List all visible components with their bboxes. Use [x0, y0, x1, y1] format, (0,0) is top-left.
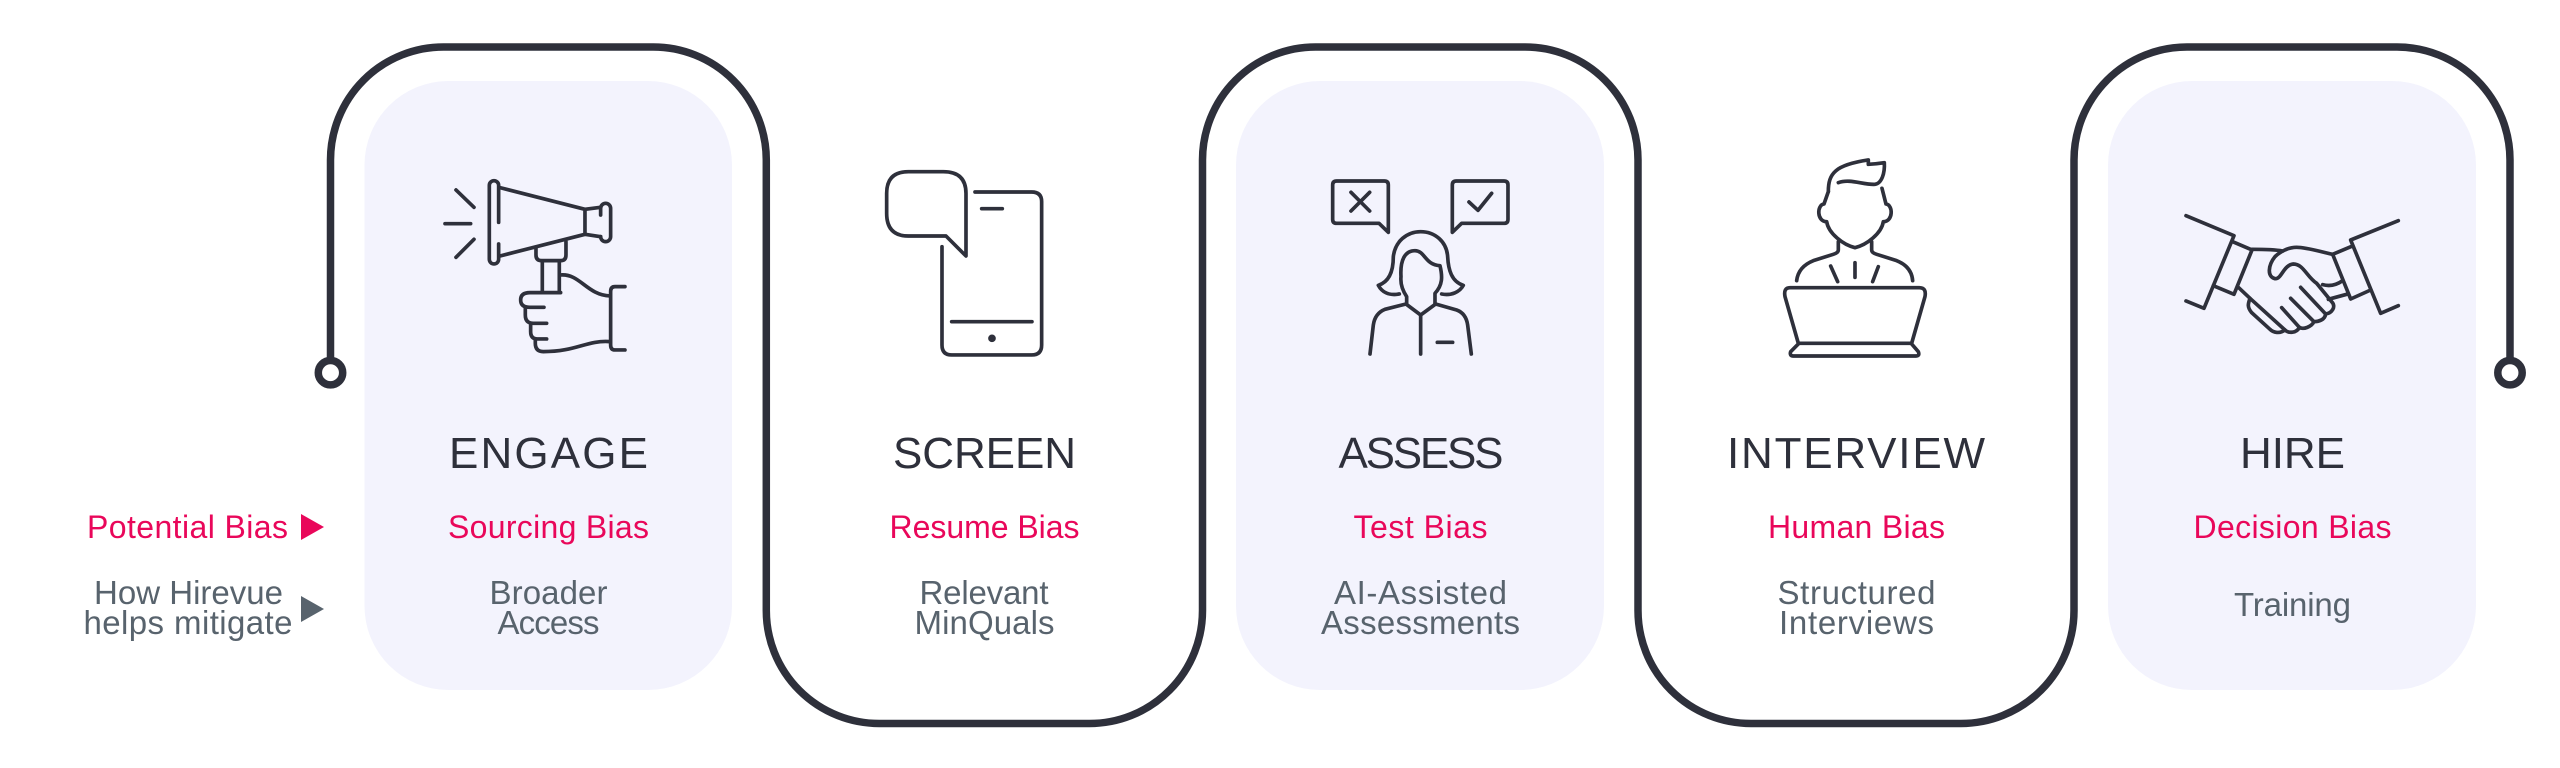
arrow: how hirevue helps mitigate	[301, 596, 324, 622]
heading: engage: ENGAGE	[449, 429, 648, 478]
column: screen	[887, 172, 1080, 641]
label: how hirevue helps mitigate: helps mitigate	[84, 604, 292, 641]
mitigation: ai-assisted assessments: AI-Assisted	[1334, 574, 1507, 611]
heading: interview: INTERVIEW	[1727, 429, 1985, 478]
row labels	[84, 509, 324, 641]
mitigation: training: Training	[2234, 586, 2351, 623]
bias: human bias: Human Bias	[1768, 509, 1945, 545]
mitigation: relevant minquals: Relevant	[920, 574, 1048, 611]
panel background: engage	[364, 81, 732, 690]
mitigation: relevant minquals: MinQuals	[914, 604, 1054, 641]
heading: hire: HIRE	[2240, 429, 2345, 478]
bias: resume bias: Resume Bias	[890, 509, 1080, 545]
icon: phone with speech bubble	[887, 172, 1042, 355]
arrow: potential bias	[301, 514, 324, 540]
bias: test bias: Test Bias	[1354, 509, 1488, 545]
bias: decision bias: Decision Bias	[2194, 509, 2392, 545]
winding connector line with end circles	[318, 47, 2522, 724]
mitigation: structured interviews: Structured	[1778, 574, 1936, 611]
column: hire	[2186, 216, 2398, 623]
mitigation: broader access: Access	[498, 604, 600, 641]
label: how hirevue helps mitigate: How Hirevue	[94, 574, 283, 611]
label: potential bias: Potential Bias	[87, 509, 288, 545]
panel background: assess	[1236, 81, 1604, 690]
heading: screen: SCREEN	[893, 429, 1076, 478]
icon: handshake	[2186, 216, 2398, 332]
panel background: hire	[2108, 81, 2476, 690]
icon: person with cross and check speech boxes	[1333, 181, 1508, 354]
icon: megaphone in hand	[445, 181, 625, 352]
mitigation: structured interviews: Interviews	[1779, 604, 1934, 641]
bias: sourcing bias: Sourcing Bias	[448, 509, 649, 545]
mitigation: broader access: Broader	[490, 574, 608, 611]
column: engage	[445, 181, 649, 641]
heading: assess: ASSESS	[1338, 429, 1504, 478]
mitigation: ai-assisted assessments: Assessments	[1321, 604, 1520, 641]
icon: man at laptop	[1785, 160, 1925, 356]
column: assess	[1321, 181, 1520, 641]
column: interview	[1727, 160, 1985, 641]
